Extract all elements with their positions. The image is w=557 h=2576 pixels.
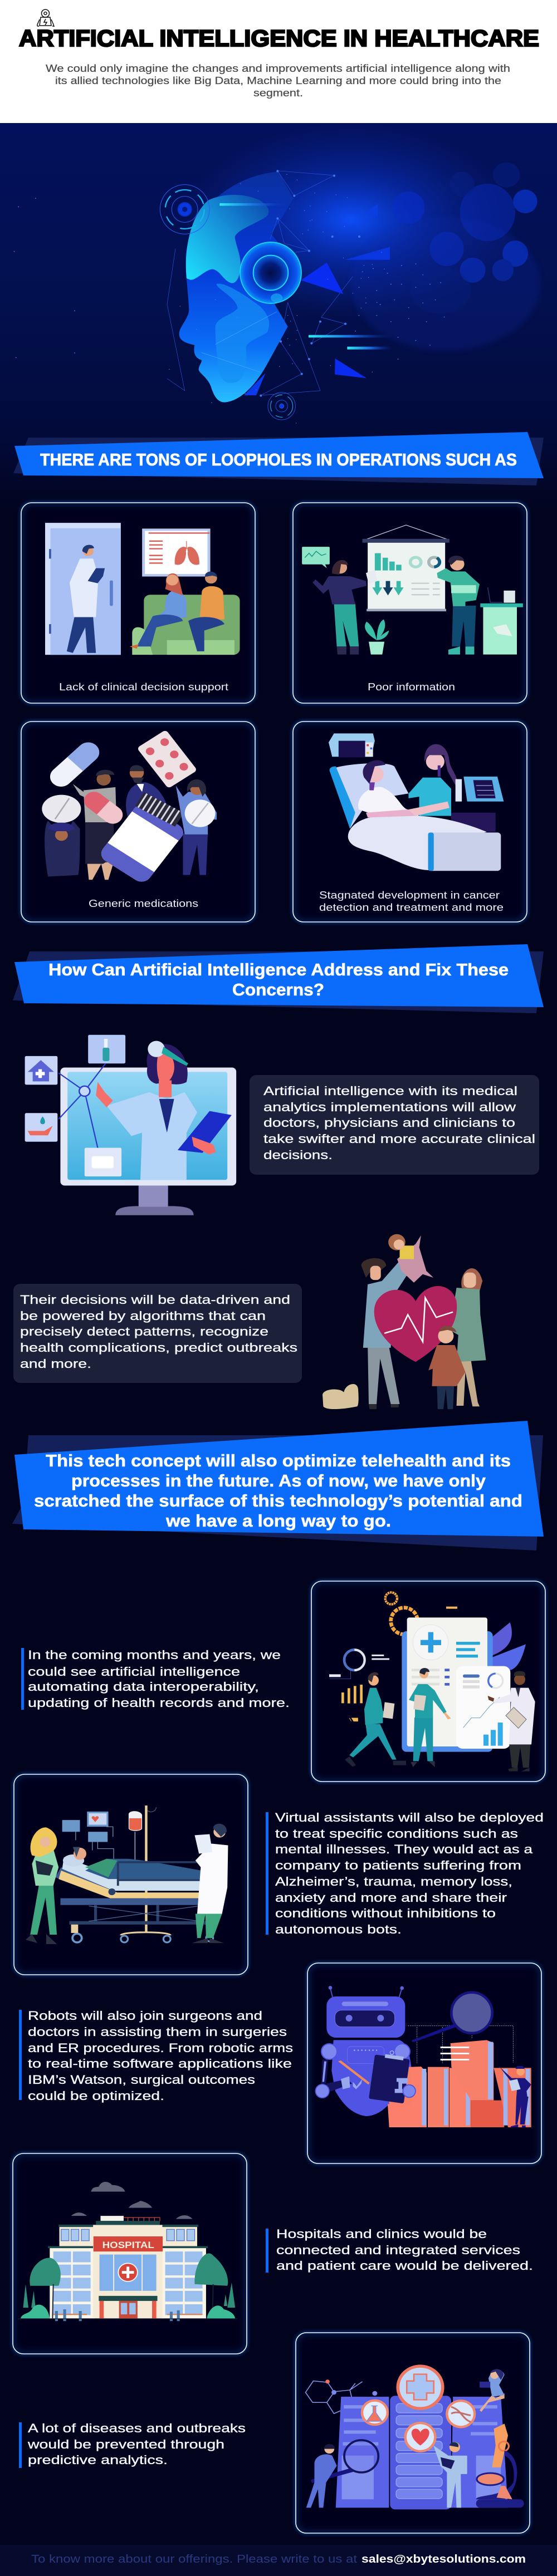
text block: coming months	[21, 1648, 290, 1710]
panel: hospital bed scene	[14, 1774, 248, 1975]
footer	[0, 2545, 557, 2576]
text block: virtual assistants: conditions without inhibitions to	[275, 1906, 496, 1920]
text block: virtual assistants: Alzheimer’s, trauma, memory loss,	[275, 1875, 512, 1888]
text block: virtual assistants: company to patients suffering from	[275, 1858, 521, 1872]
illustration: doctor and waiting patients	[45, 523, 240, 655]
core ring	[240, 242, 301, 303]
panel: hospital	[13, 2153, 247, 2354]
icon: robot logo	[37, 9, 55, 26]
text block: coming months: In the coming months and years, we	[28, 1648, 281, 1662]
text block: predictive analytics: predictive analytics.	[28, 2453, 168, 2467]
intro text: segment.	[253, 87, 303, 99]
text block: data-driven decisions: and more.	[20, 1357, 91, 1371]
illustration: robot and files	[315, 1986, 531, 2127]
target ring	[160, 185, 209, 234]
text block: robots: IBM’s Watson, surgical outcomes	[28, 2073, 255, 2087]
banner: how can AI fix: Concerns?	[232, 980, 324, 999]
sign text: HOSPITAL	[102, 2240, 154, 2250]
footer: To know more about our offerings. Please write to us at	[31, 2553, 358, 2565]
text block: hospitals and clinics	[266, 2227, 533, 2273]
text block: data-driven decisions	[13, 1284, 302, 1383]
text block: virtual assistants: mental illnesses. They would act as a	[275, 1842, 533, 1856]
banner: telehealth statement	[12, 1421, 544, 1550]
text block: robots: could be optimized.	[28, 2089, 164, 2103]
text block: data-driven decisions: health complications, predict outbreaks	[20, 1341, 297, 1355]
banner: telehealth statement: processes in the future. As of now, we have only	[71, 1471, 486, 1490]
head	[160, 171, 392, 423]
panel: lack of clinical decision support	[21, 503, 255, 703]
caption	[319, 890, 504, 913]
text block: robots: doctors in assisting them in surgeries	[28, 2025, 287, 2039]
text block: AI medical analytics: take swifter and more accurate clinical	[263, 1132, 535, 1146]
panel: robot with folders	[307, 1963, 541, 2163]
banner: telehealth statement: This tech concept will also optimize telehealth and its	[46, 1451, 511, 1470]
intro text	[46, 63, 510, 99]
text block: data-driven decisions: precisely detect patterns, recognize	[20, 1324, 268, 1338]
text block: hospitals and clinics: and patient care would be delivered.	[276, 2259, 533, 2273]
caption: Stagnated development in cancer	[319, 890, 500, 901]
illustration: medical research dashboard	[306, 2366, 524, 2509]
text block: virtual assistants: anxiety and more and share their	[275, 1891, 507, 1905]
text block: robots	[19, 2009, 293, 2103]
text block: predictive analytics: would be prevented through	[27, 2437, 224, 2451]
illustration: records with staff	[329, 1592, 535, 1772]
text block: coming months: updating of health records and more.	[28, 1696, 290, 1710]
light bars	[219, 203, 392, 350]
banner: loopholes heading	[13, 432, 544, 485]
text block: data-driven decisions: Their decisions will be data-driven and	[20, 1293, 290, 1307]
illustration: family with heart	[323, 1234, 486, 1409]
text block: virtual assistants	[266, 1810, 544, 1936]
intro text: its allied technologies like Big Data, Machine Learning and more could bring into the	[55, 75, 501, 86]
illustration: patient, nurse and doctor	[26, 1805, 228, 1944]
illustration: telehealth doctor on monitor	[25, 1035, 236, 1215]
banner: how can AI fix: How Can Artificial Intelligence Address and Fix These	[48, 960, 509, 979]
illustration: presentation board	[302, 525, 523, 655]
footer: sales@xbytesolutions.com	[361, 2553, 526, 2565]
text block: coming months: automating data interoperability,	[28, 1680, 259, 1694]
banner: loopholes heading: THERE ARE TONS OF LOOPHOLES IN OPERATIONS SUCH AS	[40, 450, 517, 469]
hero: AI head illustration	[0, 123, 557, 513]
caption: Lack of clinical decision support	[59, 681, 228, 693]
text block: robots: to real-time software applications like	[28, 2057, 292, 2070]
text block: hospitals and clinics: Hospitals and clinics would be	[276, 2227, 487, 2241]
text block: virtual assistants: autonomous bots.	[275, 1922, 402, 1936]
panel: poor information	[293, 503, 527, 703]
bottom target ring	[268, 392, 295, 420]
caption: Poor information	[368, 681, 455, 693]
title: ARTIFICIAL INTELLIGENCE IN HEALTHCARE	[19, 25, 539, 51]
banner: telehealth statement: scratched the surface of this technology’s potential and	[34, 1491, 522, 1510]
text block: AI medical analytics: analytics implementations will allow	[263, 1100, 516, 1114]
intro text: We could only imagine the changes and improvements artificial intelligence along with	[46, 63, 510, 74]
panel: biotech analytics	[296, 2333, 530, 2533]
text block: coming months: could see artificial intelligence	[28, 1665, 240, 1679]
panel: medical records team	[311, 1581, 545, 1782]
scattered particles	[14, 198, 444, 359]
text block: predictive analytics	[19, 2421, 246, 2468]
triangles	[244, 204, 390, 395]
text block: AI medical analytics	[250, 1075, 539, 1175]
text block: AI medical analytics: decisions.	[263, 1148, 333, 1162]
text block: hospitals and clinics: connected and integrated services	[276, 2243, 520, 2257]
text block: virtual assistants: to treat specific conditions such as	[275, 1827, 518, 1841]
caption: Generic medications	[89, 898, 198, 909]
text block: robots: and ER procedures. From robotic arms	[28, 2041, 293, 2055]
text block: AI medical analytics: doctors, physicians and clinicians to	[263, 1116, 515, 1130]
panel: generic medications	[21, 722, 255, 922]
panel: stagnated development	[293, 722, 527, 922]
banner: how can AI fix	[13, 944, 544, 1013]
text block: predictive analytics: A lot of diseases and outbreaks	[28, 2421, 246, 2435]
blobs on the right	[393, 163, 538, 314]
text block: virtual assistants: Virtual assistants will also be deployed	[275, 1810, 544, 1824]
illustration: people carrying pills	[42, 730, 217, 885]
banner: telehealth statement: we have a long way to go.	[165, 1511, 391, 1530]
text block: data-driven decisions: be powered by algorithms that can	[20, 1309, 266, 1323]
illustration: patient and nurse	[329, 733, 504, 871]
text block: AI medical analytics: Artificial intelligence with its medical	[263, 1084, 517, 1098]
caption: detection and treatment and more	[319, 902, 504, 913]
header panel	[0, 0, 557, 123]
text block: robots: Robots will also join surgeons and	[28, 2009, 262, 2023]
illustration: hospital building	[18, 2182, 237, 2321]
